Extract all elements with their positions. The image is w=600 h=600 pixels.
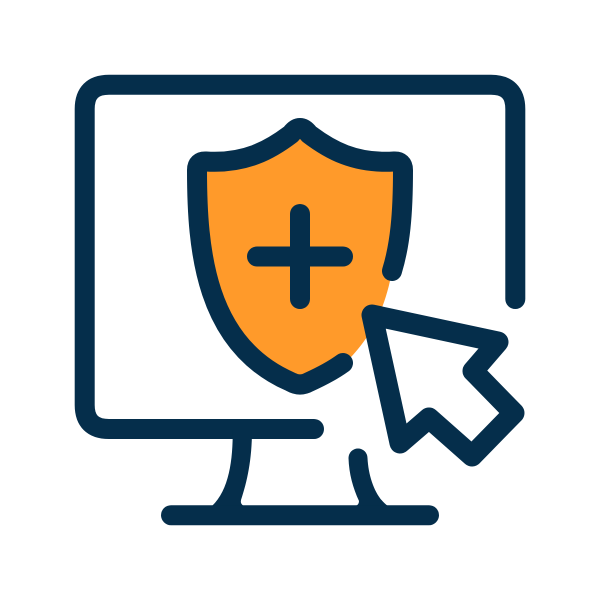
shield outline <box>197 128 403 384</box>
monitor screen outline <box>85 85 515 429</box>
plus sign <box>257 214 343 299</box>
cursor arrow <box>372 315 514 456</box>
monitor base <box>171 505 429 525</box>
shield fill <box>197 128 403 386</box>
left stem <box>212 430 252 506</box>
monitor stand <box>212 430 388 506</box>
right stem <box>348 448 388 506</box>
